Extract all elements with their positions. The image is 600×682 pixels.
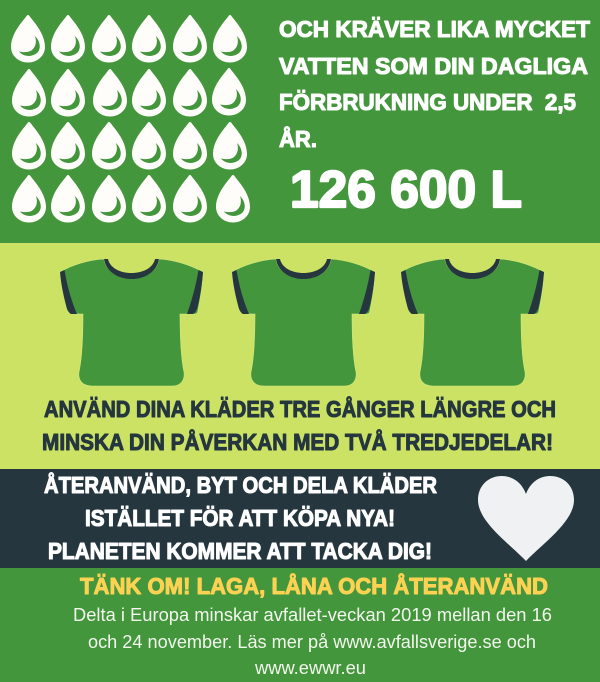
text: reuse, swap and share: PLANETEN KOMMER ATT TACKA DIG! [48, 538, 432, 564]
text: water comparison: OCH KRÄVER LIKA MYCKET [279, 16, 590, 42]
icon grid: water drops [11, 15, 250, 222]
panel: t-shirts [0, 243, 600, 469]
panel: water drops and water use [0, 0, 600, 243]
icon: t-shirt 1 [60, 259, 203, 386]
text: reuse, swap and share [44, 471, 437, 564]
text: use clothes longer: MINSKA DIN PÅVERKAN MED TVÅ TREDJEDELAR! [42, 428, 553, 455]
text: reuse, swap and share: ÅTERANVÄND, BYT OCH DELA KLÄDER [44, 471, 437, 498]
text: use clothes longer [42, 395, 556, 455]
text: water comparison: FÖRBRUKNING UNDER 2,5 [279, 89, 576, 115]
text: event details: www.ewwr.eu [254, 658, 366, 678]
panel: footer [0, 568, 600, 682]
text: reuse, swap and share: ISTÄLLET FÖR ATT KÖPA NYA! [85, 505, 395, 531]
text: water comparison: VATTEN SOM DIN DAGLIGA [279, 53, 588, 79]
text: event details [73, 605, 552, 678]
text: water comparison [279, 16, 590, 152]
heading: rethink: TÄNK OM! LAGA, LÅNA OCH ÅTERANVÄND [80, 572, 548, 599]
text: event details: och 24 november. Läs mer på www.avfallsverige.se och [88, 632, 536, 652]
panel: reuse message [0, 469, 600, 568]
text: event details: Delta i Europa minskar avfallet-veckan 2019 mellan den 16 [73, 605, 552, 625]
icon: t-shirt 3 [401, 259, 544, 386]
text: water comparison: ÅR. [279, 125, 317, 152]
big number: 126 600 L: 126 600 L [290, 161, 522, 219]
icon: t-shirt 2 [232, 259, 375, 386]
icon: heart [478, 476, 574, 561]
